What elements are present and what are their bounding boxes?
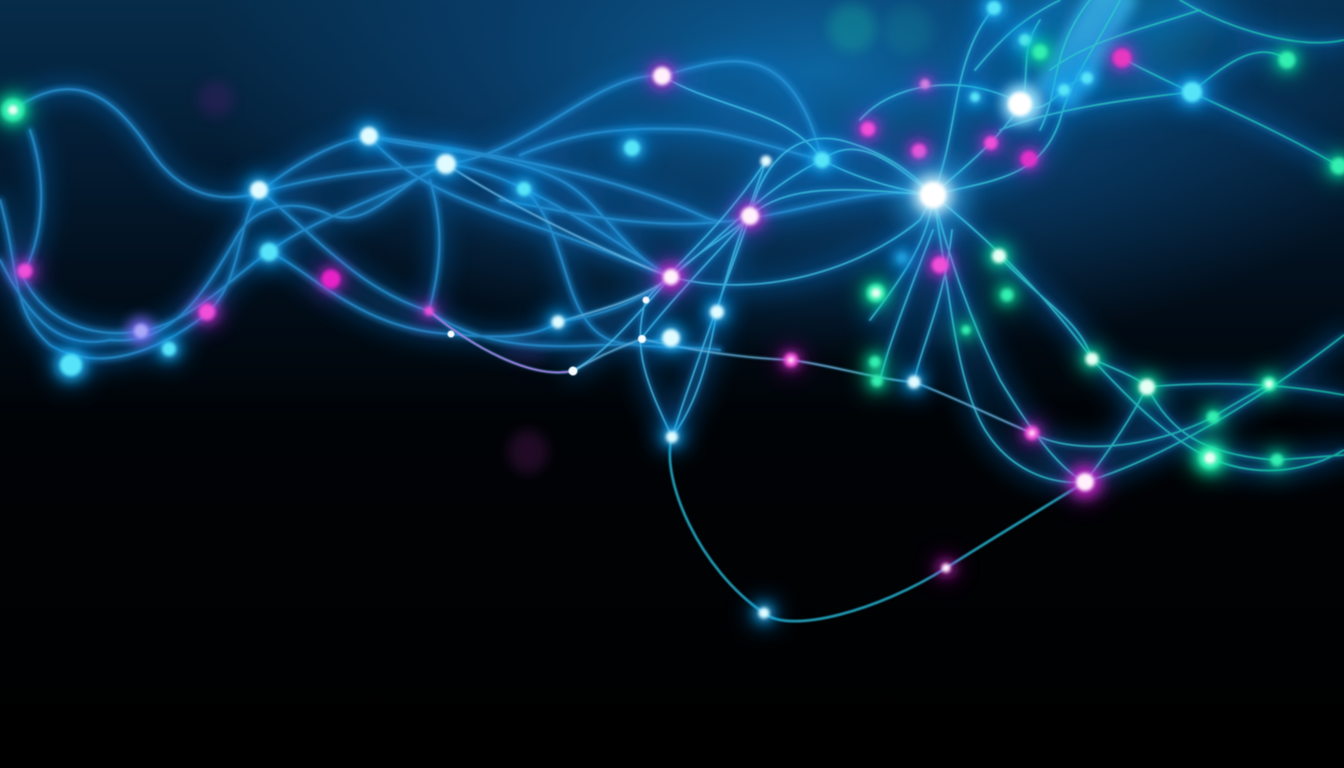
node: central white hub — [897, 159, 969, 231]
nodes: green — [2, 45, 1344, 470]
wires: fine bright strands — [429, 164, 1085, 621]
wires: right cluster — [573, 0, 1344, 482]
nodes: cyan and blue — [59, 0, 1202, 619]
wires: left cluster — [0, 61, 933, 358]
wires: soft glow layer — [0, 0, 1344, 482]
node: upper white hub — [1002, 84, 1042, 124]
wires: wide blue haze — [0, 0, 1344, 482]
nodes: magenta and pink — [18, 49, 1131, 573]
